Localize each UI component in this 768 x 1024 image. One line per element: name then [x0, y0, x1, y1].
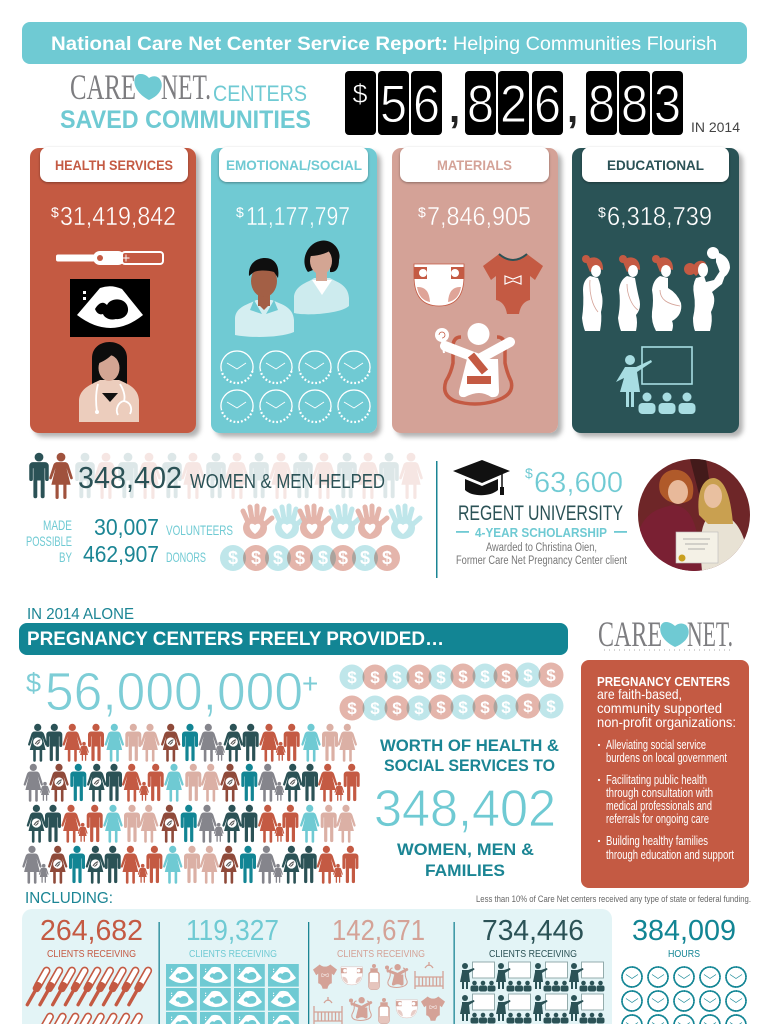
stat: health clients: 264,682 [40, 915, 143, 947]
total dollar odometer: IN 2014 [691, 119, 740, 135]
icon: coin rows: $ [347, 699, 357, 718]
icon: ultrasound tiles [166, 964, 299, 1024]
scholarship block: REGENT UNIVERSITY [458, 502, 623, 525]
stat: material clients: 142,671 [332, 915, 425, 947]
Care Net Centers logo and heading: CARE [70, 67, 136, 107]
panel: about pregnancy centers: community supported [597, 700, 722, 716]
icon: coin rows: $ [347, 668, 357, 687]
icon: donor coins [220, 545, 400, 571]
row of families 3 [27, 805, 356, 843]
big dollar figure: 56,000,000 [45, 662, 303, 722]
icon: coin rows: $ [370, 699, 380, 718]
row of families 2 [24, 764, 360, 802]
stat: education clients [460, 915, 604, 1024]
total dollar odometer: 8 [588, 75, 615, 134]
volunteers and donors: 462,907 [83, 541, 159, 567]
icon: coin rows: $ [458, 698, 468, 717]
icon: coin rows: $ [523, 697, 533, 716]
stat: material clients: CLIENTS RECEIVING [337, 948, 425, 960]
people grid [22, 724, 360, 884]
panel: educational: EDUCATIONAL [607, 157, 704, 173]
icon: coin rows: $ [436, 698, 446, 717]
icon: donor coins: $ [228, 548, 238, 568]
panel: health services: HEALTH SERVICES [55, 157, 173, 173]
stat: ultrasound clients: 119,327 [186, 915, 279, 947]
icon: onesie [483, 254, 543, 314]
icon: coin rows: $ [392, 699, 402, 718]
panel: materials: MATERIALS [437, 157, 512, 173]
Care Net Centers logo and heading: NET. [161, 67, 211, 107]
panel: about pregnancy centers: Facilitating public health [606, 773, 707, 787]
row of families 1 [28, 724, 357, 762]
scholarship block: 4-YEAR SCHOLARSHIP [475, 525, 607, 540]
panel: about pregnancy centers [581, 660, 749, 888]
icon: woman counselor [294, 241, 349, 314]
scholarship block: 63,600 [534, 467, 623, 499]
icon: pregnancy test [56, 251, 163, 265]
worth of services text: 348,402 [374, 780, 556, 838]
volunteers and donors [26, 506, 420, 571]
icon: hands [243, 506, 420, 539]
icon: coin rows: $ [480, 667, 490, 686]
stat: education clients: CLIENTS RECEIVING [489, 948, 577, 960]
icon: coin rows: $ [501, 667, 511, 686]
title banner: National Care Net Center Service Report: [51, 34, 448, 55]
panel: about pregnancy centers: medical professionals and [606, 799, 712, 813]
panel: about pregnancy centers: PREGNANCY CENTERS [597, 674, 730, 689]
Care Net Centers logo and heading [60, 67, 311, 134]
scholarship block: Former Care Net Pregnancy Center client [456, 555, 628, 567]
row of families 4 [22, 846, 358, 884]
icon: coin rows: $ [501, 698, 511, 717]
icon: coin rows: $ [436, 668, 446, 687]
icon: donor coins: $ [251, 548, 261, 568]
icon: coin rows: $ [546, 697, 556, 716]
icon: donor coins: $ [360, 548, 370, 568]
icon: ultrasound [70, 279, 150, 337]
icon: coin rows: $ [414, 668, 424, 687]
Care Net logo: NET. [687, 614, 733, 654]
section heading bar [19, 623, 568, 655]
big dollar figure: + [302, 668, 318, 699]
panel: clients receiving [22, 909, 612, 1024]
total dollar odometer: $ [352, 79, 368, 109]
panel: about pregnancy centers: Building healthy families [606, 834, 708, 848]
total dollar odometer: 8 [621, 75, 648, 134]
icon: donor coins: $ [338, 548, 348, 568]
icon: test sticks [23, 966, 153, 1024]
panel: educational [572, 147, 739, 433]
volunteers and donors: DONORS [166, 549, 206, 565]
panel: materials: $ [418, 204, 426, 220]
panel: educational: $ [598, 204, 606, 220]
icon: man counselor [235, 258, 294, 337]
section label: IN 2014 ALONE [27, 606, 134, 623]
volunteers and donors: POSSIBLE [26, 533, 72, 549]
section heading bar: PREGNANCY CENTERS FREELY PROVIDED… [27, 629, 444, 650]
people helped row: 348,402 [78, 460, 182, 495]
worth of services text: SOCIAL SERVICES TO [384, 756, 555, 775]
panel: emotional/social [211, 147, 377, 433]
title banner: Helping Communities Flourish [453, 34, 717, 55]
stat: ultrasound clients [166, 915, 299, 1024]
people helped row: WOMEN & MEN HELPED [190, 471, 385, 493]
panel: emotional/social: $ [236, 204, 244, 220]
Care Net Centers logo and heading: CENTERS [213, 81, 307, 106]
total dollar odometer: 2 [500, 75, 527, 134]
total dollar odometer: 6 [534, 75, 561, 134]
panel: materials: 7,846,905 [427, 201, 531, 231]
panel: health services: 31,419,842 [60, 201, 176, 231]
scholarship block: Awarded to Christina Oien, [486, 542, 597, 554]
icon: coin rows: $ [392, 668, 402, 687]
panel: emotional/social: EMOTIONAL/SOCIAL [226, 157, 362, 173]
big dollar figure: $ [26, 668, 41, 698]
divider [436, 461, 438, 578]
total dollar odometer: , [449, 87, 460, 131]
icon: coin rows: $ [414, 699, 424, 718]
icon: donor coins: $ [318, 548, 328, 568]
panel: materials [392, 147, 558, 433]
icon: coin rows: $ [546, 666, 556, 685]
total dollar odometer: 5 [380, 75, 407, 134]
panel: health services [30, 147, 196, 433]
icon: coin rows: $ [370, 668, 380, 687]
title banner [22, 22, 747, 64]
stat: volunteer hours: HOURS [668, 948, 700, 960]
stat: ultrasound clients: CLIENTS RECEIVING [189, 948, 277, 960]
icon: row of people [29, 453, 423, 499]
volunteers and donors: VOLUNTEERS [166, 522, 233, 538]
panel: about pregnancy centers: non-profit organizations: [597, 714, 736, 730]
icon: coin rows: $ [458, 667, 468, 686]
panel: about pregnancy centers: Alleviating social service [606, 738, 706, 752]
stat: volunteer hours [619, 915, 749, 1024]
Care Net logo: CARE [598, 614, 662, 654]
volunteers and donors: BY [59, 549, 72, 565]
stat: material clients [313, 915, 445, 1024]
icon: donor coins: $ [273, 548, 283, 568]
total dollar odometer [345, 71, 740, 135]
total dollar odometer: 8 [467, 75, 494, 134]
icon: donor coins: $ [382, 548, 392, 568]
Care Net Centers logo and heading: SAVED COMMUNITIES [60, 106, 311, 134]
total dollar odometer: 6 [413, 75, 440, 134]
icon: car seat [435, 323, 512, 404]
including label: INCLUDING: [25, 890, 113, 907]
photo: award recipients [638, 459, 750, 571]
icon: donor coins: $ [295, 548, 305, 568]
icon: classroom groups [460, 962, 604, 1024]
icon: coin rows: $ [480, 698, 490, 717]
icon: hour clocks [619, 964, 749, 1024]
stat: health clients: CLIENTS RECEIVING [47, 948, 136, 960]
panel: about pregnancy centers: burdens on local government [606, 751, 727, 765]
worth of services text: WOMEN, MEN & [397, 840, 534, 859]
worth of services text: FAMILIES [425, 861, 505, 880]
people helped row [29, 453, 423, 499]
icon: baby items [313, 962, 445, 1024]
icon: doctor [79, 342, 139, 422]
volunteers and donors: MADE [43, 517, 72, 533]
icon: pregnancy stages [582, 247, 730, 331]
panel: emotional/social: 11,177,797 [246, 201, 350, 231]
panel: educational: 6,318,739 [607, 201, 712, 231]
stat: health clients [23, 915, 153, 1024]
worth of services text: WORTH OF HEALTH & [380, 736, 559, 755]
scholarship block: $ [525, 465, 533, 481]
icon: coin rows [340, 662, 564, 720]
panel: health services: $ [51, 204, 59, 220]
stat: education clients: 734,446 [482, 915, 584, 947]
panel: about pregnancy centers: referrals for ongoing care [606, 812, 709, 826]
total dollar odometer: 3 [654, 75, 681, 134]
scholarship block [453, 460, 628, 567]
total dollar odometer: , [567, 87, 578, 131]
icon: clocks [221, 351, 370, 422]
panel: about pregnancy centers: through consultation with [606, 786, 713, 800]
stat: volunteer hours: 384,009 [632, 915, 736, 947]
icon: teacher and students [616, 347, 696, 414]
icon: coin rows: $ [523, 666, 533, 685]
icon: graduation cap [453, 460, 510, 495]
panel: about pregnancy centers: are faith-based, [597, 686, 682, 702]
worth of services text [374, 736, 559, 880]
volunteers and donors: 30,007 [94, 514, 159, 540]
icon: diaper [414, 264, 464, 306]
